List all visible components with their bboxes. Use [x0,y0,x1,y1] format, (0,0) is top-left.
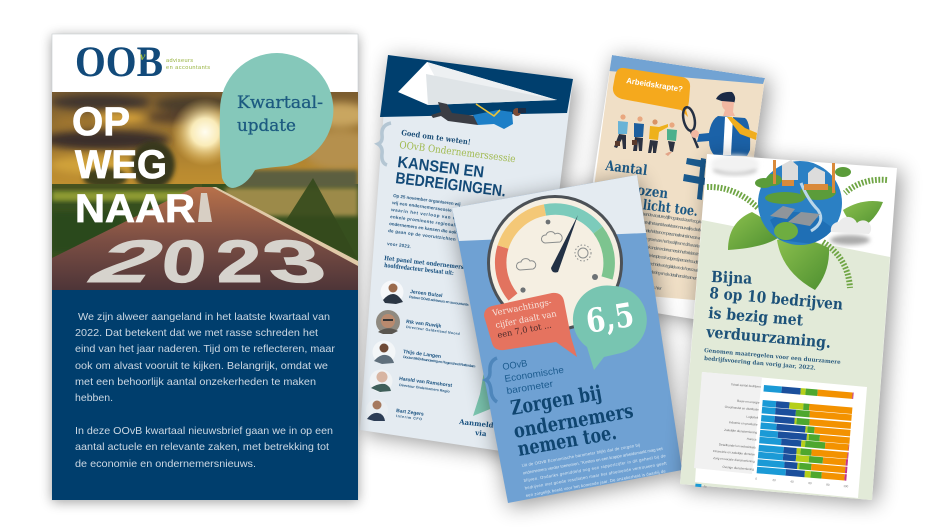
stacked bar chart [694,372,867,500]
body text: labour flyer: en de verwachting is dat de krapte ook volgend jaar aanhoudt bij [615,248,701,265]
intro text: waarin het verloop van de [390,207,459,221]
road text: 2023: 2 [75,228,182,295]
intro paragraph 1: ook om alvast vooruit te kijken. Belangrijk, omdat we [75,361,328,372]
panelist: Bart: Bart Zegers [396,408,424,418]
headline: OP WEG NAAR [72,100,195,231]
chart row labels: Financiele en zakelijke diensten [713,449,756,457]
chart axis [755,477,849,488]
session heading [395,128,516,200]
sustainability title: verduurzaming. [705,322,832,352]
intro paragraph 1: met een behoorlijk aantal onzekerheden te maken [75,377,316,388]
road text: 2023: 2 [214,228,264,295]
chart axis: 0 [755,477,757,481]
speech bubble: Arbeidskrapte: Arbeidskrapte? [626,76,683,94]
panelist: Harold: Directeur Ondernemers Regio [399,383,451,394]
speech bubble: expectation: Verwachtings- [491,298,553,319]
teal bubble tail and sign-up text: via [474,428,487,438]
panel: sustainability flyer [680,154,901,503]
intro text: voor 2023. [387,241,411,249]
chart axis: 40 [790,480,794,484]
heading: Aantal werklozen: Aantal [604,158,648,179]
logo: en accountants [166,65,210,71]
body text: labour flyer [642,212,702,290]
chart axis: 60 [808,481,812,485]
chart row labels: Zakelijke dienstverlening [724,428,757,435]
header band [380,55,573,117]
speech bubble: 6,5: 6,5 [583,295,637,341]
illustration: job seekers [614,114,677,156]
speech bubble: expectation: cijfer daalt van [495,309,558,331]
speech bubble: 6,5 [573,285,647,370]
barometer body text: ondernemers verder toenemen. "Kosten en een krappe arbeidsmarkt mag wel [522,446,663,475]
headline: OP WEG NAAR: WEG [75,143,167,187]
intro paragraph 1: hebben. [75,393,113,404]
body text: labour flyer: veel ondernemers moeite hebben om personeel te vinden voor werk [618,224,704,241]
intro paragraph 2 [75,426,333,470]
session heading: KANSEN EN [397,154,485,182]
chart row labels: Industrie en productie [729,420,758,427]
chart row labels: Groothandel en distributie [725,405,759,412]
houses [782,160,798,180]
speech bubble: Kwartaal-update [220,53,333,188]
barometer title: nemen toe. [516,420,618,461]
illustration: green globe [707,160,887,290]
speech bubble: expectation: een 7,0 tot ... [497,321,553,341]
body text: labour flyer: meeste sectoren terwijl het aantal werklozen nauwelijks daalt en [619,216,705,233]
intro paragraph 1: 2022. Dat betekent dat we met rasse schreden het [75,328,318,339]
chart legend [695,484,707,489]
intro paragraph 2: de economie en ondernemersnieuws. [75,459,256,470]
panelist: Rik: Rik van Ruwijk [406,319,442,330]
heading: Aantal werklozen [604,160,697,216]
intro text: enkele prominente regionale [390,214,458,228]
road text: 2023: 3 [254,229,335,296]
logo: v [140,49,146,63]
barometer label: barometer [506,379,554,397]
session heading: OOvB Ondernemerssessie [399,140,516,165]
illustration: paper plane with businessman [398,62,557,129]
intro text: wij een ondernemerssessie die [391,200,460,214]
panelist: Jeroen [380,280,469,307]
intro text [387,193,461,249]
chart row labels: Overige dienstverlening [722,465,754,471]
speech bubble: Arbeidskrapte [613,68,690,117]
session heading: Goed om te weten! [401,128,471,147]
road text: 2023: 0 [159,228,210,295]
brace [486,358,497,402]
barometer body text: bedrijven met goede resultaten maar het afnemende vertrouwen geeft [524,460,668,490]
panel intro: hoofdredacteur bestaat uit: [384,262,454,277]
barometer title: ondernemers [512,398,635,443]
sustainability subtitle: Genomen maatregelen voor een duurzamere [704,348,841,366]
speech bubble: expectation [484,293,577,357]
barometer label [502,358,565,397]
panelist: Thijs: Doctor MKB-financiering en Hogeschool Rotterdam [403,355,476,369]
body text: labour flyer: bedrijven in de bouw zorg techniek en logistiek en de horeca als [614,256,700,273]
heading: Aantal werklozen: neemt licht toe. [600,192,699,220]
barometer body text: Uit de OOvB Economische barometer blijkt dat de zorgen bij [521,442,640,468]
teal bubble tail and sign-up text: Aanmelden [458,417,504,431]
headline: OP WEG NAAR: NAAR [75,187,195,231]
chart row labels: Horeca [747,437,757,442]
barometer title [509,380,635,461]
panelist: Bart: Interim CFO [396,414,422,421]
ferns [707,180,887,288]
chart row labels: Totaal aantal bedrijven [731,382,761,389]
flyer collage [360,55,901,507]
decorative navy bracket [683,158,706,200]
chart row labels: Detailhandel en webwinkels [719,442,756,450]
chart row labels: Logistiek [746,415,759,420]
panel: economic barometer flyer [452,175,684,507]
panelist: Jeroen: Partner OOvB adviseurs en accountants [409,295,469,307]
barometer label: Economische [504,365,565,385]
gauge icons [516,232,591,270]
body text: labour flyer: Lees meer hierover bij ons hier [612,279,663,291]
small cloud shadow [713,165,757,175]
sustainability title: is bezig met [708,303,805,330]
road text: 2023 [75,228,335,296]
intro text: Op 25 november organiseren wij [393,193,461,207]
brace [378,123,391,165]
chart legend: Ja [703,484,707,489]
body text: labour flyer: volgens recent onderzoek onder ondernemers in het hele land nu [616,240,702,257]
chart axis: 80 [826,483,830,487]
body text: labour flyer: ook bij de zakelijke dienstverlening en de detailhandel samen. [613,264,699,281]
sustainability title [705,267,844,352]
navy intro panel [52,290,358,500]
panelist: Rik: Directeur Gelderland Noord [406,325,460,336]
panel: labour shortage flyer [575,55,769,327]
panelist: Harold [370,370,453,394]
photo: sunset road [40,92,376,290]
panelist: Thijs: Thijs de Langen [403,349,441,360]
panelist: Jeroen: Jeroen Bulzel [410,289,443,299]
chart rows [757,385,854,481]
panel: main newsletter cover [40,34,376,502]
panelist: Bart [366,399,424,421]
sustainability title: Bijna [711,267,753,288]
panelist: Harold: Harold van Ramshorst [399,376,453,389]
heading: Aantal werklozen: werklozen [599,178,669,202]
body text: labour flyer: Het aantal openstaande vacatures blijft nog steeds zeer hoog in de [620,208,706,225]
logo: OOB [75,39,163,86]
barometer body text: een zorgelijk beeld voor het komende jaar. De onzekerheid is daarbij de [525,468,667,498]
sustainability subtitle: bedrijfsvoering dan vorig jaar, 2022. [704,356,816,372]
chart row labels [712,381,762,471]
chart axis: 20 [772,478,776,482]
illustration: man with magnifying glass [681,92,757,156]
sustainability title: 8 op 10 bedrijven [709,283,844,314]
speech bubble: Kwartaal-update: Kwartaal- [237,93,323,113]
barometer body text [521,442,668,498]
panel: entrepreneur session flyer [360,55,576,458]
body text: labour flyer: dat blijft liggen en de groei van het bedrijf remt dit kwartaal [617,232,703,249]
intro text: ondernemers en kansen die ook [389,221,457,235]
gauge [487,195,623,331]
panelist: Rik [376,310,460,336]
intro paragraph 1: eind van het jaar naderen. Tijd om te reflecteren, maar [75,344,336,355]
chart row labels: Zorg en sociale dienstverlening [713,456,755,463]
gauge needle [551,215,578,272]
intro paragraph 1: We zijn alweer aangeland in het laatste kwartaal van [78,312,330,323]
teal bubble tail and sign-up text [458,360,504,438]
intro paragraph 2: In deze OOvB kwartaal nieuwsbrief gaan we in op een [75,426,333,437]
chart row labels: Bouw en energie [737,399,760,405]
headline: OP WEG NAAR: OP [72,100,130,144]
barometer label: OOvB [502,358,528,373]
logo: adviseurs [166,58,193,64]
intro paragraph 1 [75,312,336,404]
barometer body text: blijven. Ondanks gemiddeld nog een rapportcijfer in dit geheel bij de [523,453,667,483]
panel intro: Het panel met ondernemers [384,255,465,271]
barometer title: Zorgen bij [509,380,603,420]
intro text: de gaan op de vooruitzichten [388,228,456,242]
speech bubble: Kwartaal-update: update [237,116,296,136]
panelist: Thijs [372,340,476,369]
chart axis: 100 [843,484,849,488]
intro paragraph 2: aantal actuele en relevante zaken, met betrekking tot [75,442,329,453]
session heading: BEDREIGINGEN. [395,170,507,200]
